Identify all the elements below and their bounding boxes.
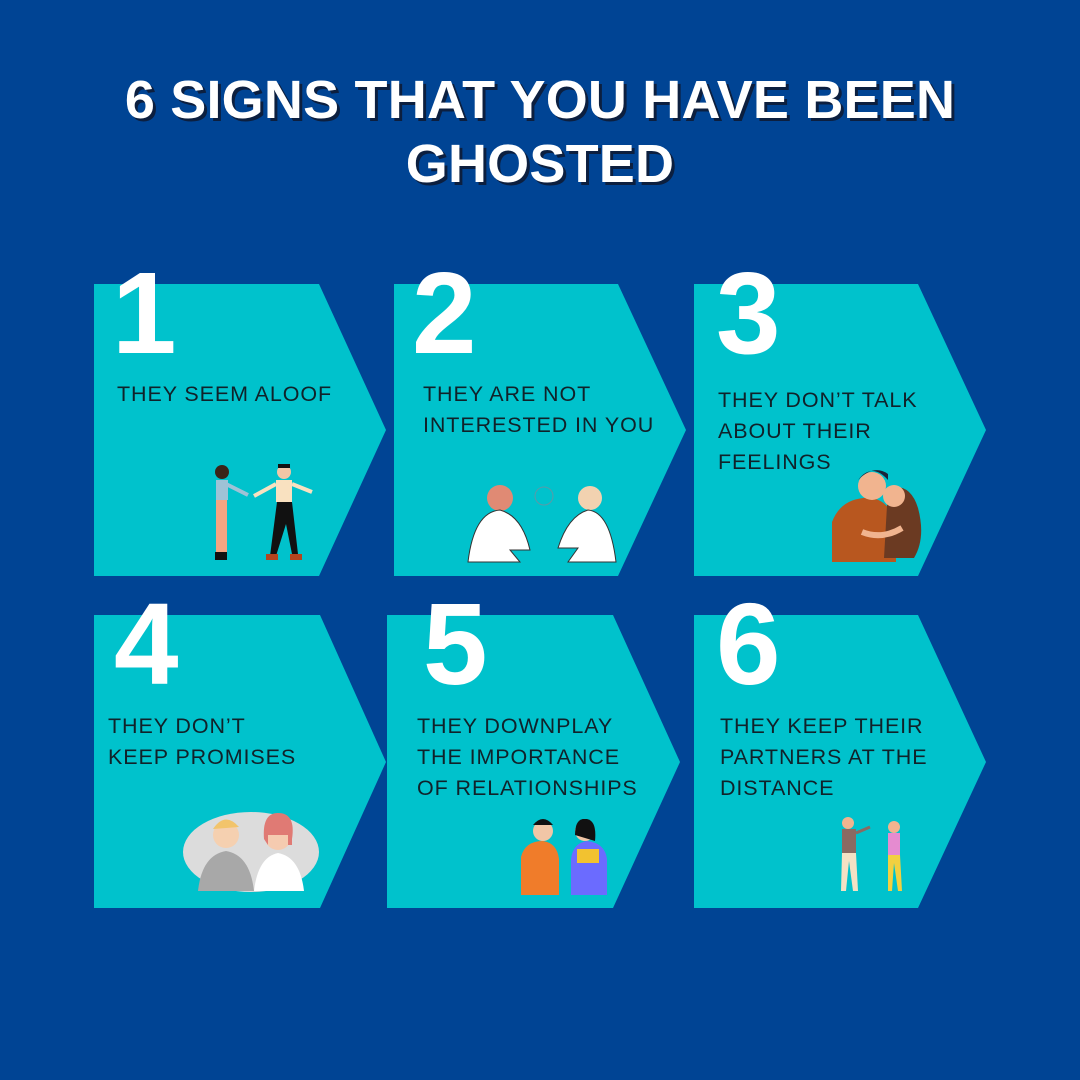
- text: [720, 714, 927, 800]
- panel: sign 2: [394, 248, 686, 576]
- text: [718, 388, 917, 474]
- text: PARTNERS AT THE: [720, 745, 927, 769]
- text: THEY KEEP THEIR: [720, 714, 923, 738]
- text: THEY DOWNPLAY: [417, 714, 613, 738]
- text: FEELINGS: [718, 450, 832, 474]
- number 4: 4: [114, 579, 179, 709]
- illustration: couple at table: [467, 485, 617, 562]
- number 6: 6: [716, 579, 781, 709]
- text: OF RELATIONSHIPS: [417, 776, 638, 800]
- panel: sign 1: [94, 248, 386, 576]
- text: THEY DON’T: [108, 714, 246, 738]
- text: [417, 714, 638, 800]
- illustration: hugging couple: [832, 470, 922, 562]
- title: 6 SIGNS THAT YOU HAVE BEEN: [125, 70, 955, 130]
- panel: sign 6: [694, 579, 986, 908]
- text: DISTANCE: [720, 776, 834, 800]
- text: [423, 382, 654, 437]
- text: THEY DON’T TALK: [718, 388, 917, 412]
- text: INTERESTED IN YOU: [423, 413, 654, 437]
- panel: sign 3: [694, 248, 986, 576]
- text: ABOUT THEIR: [718, 419, 872, 443]
- number 1: 1: [112, 248, 177, 378]
- title: [125, 70, 955, 194]
- illustration: confused pair: [183, 812, 319, 892]
- text: THE IMPORTANCE: [417, 745, 620, 769]
- illustration: talking pair: [521, 819, 607, 895]
- title: GHOSTED: [406, 134, 674, 194]
- illustration: distant pair: [841, 817, 902, 891]
- text: they seem aloof: THEY SEEM ALOOF: [117, 382, 332, 406]
- panel: sign 5: [387, 579, 680, 908]
- panel: sign 4: [94, 579, 386, 908]
- text: THEY ARE NOT: [423, 382, 591, 406]
- number 3: 3: [716, 248, 781, 378]
- text: KEEP PROMISES: [108, 745, 296, 769]
- number 2: 2: [412, 248, 477, 378]
- text: [108, 714, 296, 769]
- illustration: two people: [215, 464, 313, 560]
- number 5: 5: [423, 579, 488, 709]
